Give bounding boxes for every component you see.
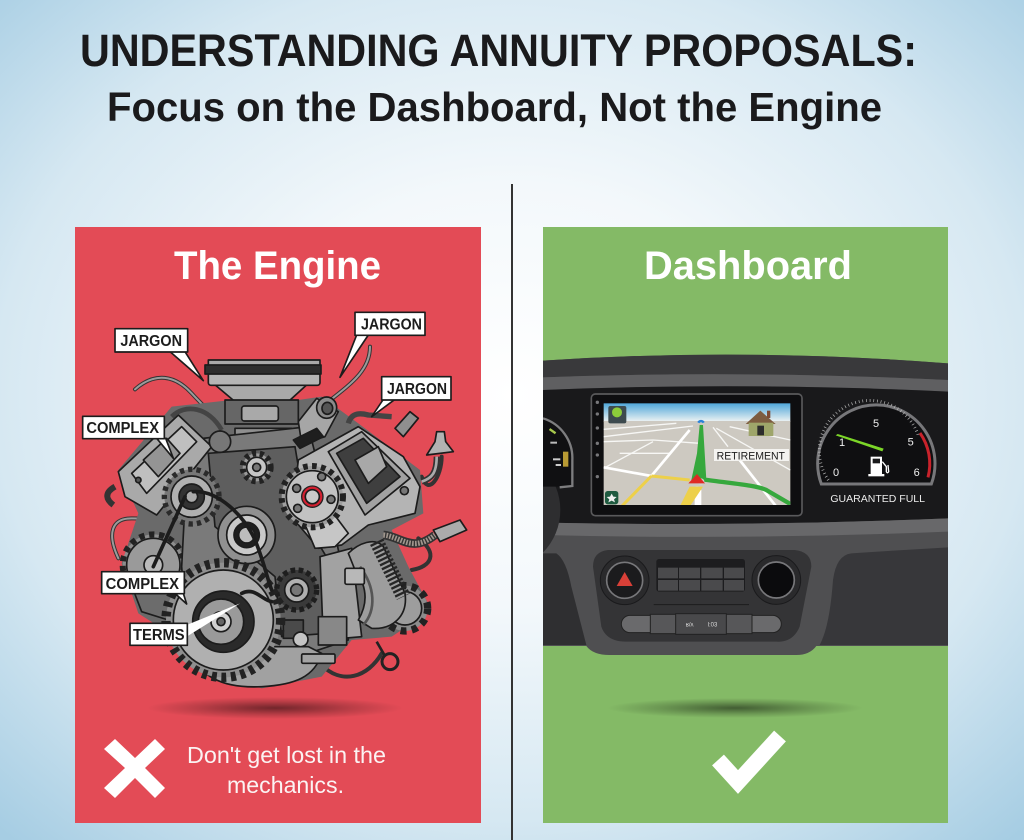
panel: dashboard [543, 227, 948, 823]
lower parts [283, 617, 398, 670]
fuel pump icon [868, 457, 889, 476]
heading: the engine: The Engine [174, 244, 381, 288]
dash body [543, 355, 948, 655]
label: jargon 2: JARGON [361, 316, 422, 333]
divider line [511, 184, 513, 840]
steering wheel [543, 486, 560, 552]
button grid [656, 559, 745, 592]
right lower panel [820, 547, 948, 645]
top hose [348, 414, 392, 423]
label: jargon 1: JARGON [120, 333, 182, 350]
panel: the engine [75, 227, 481, 823]
label: jargon 2 [340, 312, 425, 377]
dashboard shadow [607, 698, 863, 718]
caption [187, 742, 386, 798]
left gauge [543, 418, 572, 487]
air filter [205, 360, 321, 402]
guaranted full label: GUARANTED FULL [830, 494, 925, 505]
title [80, 25, 917, 130]
manifold [225, 400, 298, 443]
icon: white check mark [718, 736, 780, 782]
engine shadow [147, 697, 403, 719]
label: complex 1: COMPLEX [86, 420, 160, 437]
left lower panel [543, 553, 586, 645]
star icon [605, 491, 618, 504]
gauge numbers: 6 [914, 467, 920, 479]
center console [593, 550, 811, 642]
back right gear [382, 586, 428, 631]
label: complex 1 [83, 416, 173, 458]
solenoid and cap [395, 412, 453, 482]
oil pan [192, 647, 322, 687]
right tube [293, 397, 338, 448]
gauge numbers: 5 [873, 418, 879, 430]
caption: mechanics. [227, 772, 344, 798]
hazard knob [600, 556, 649, 605]
gauge numbers: 5 [908, 436, 914, 448]
label: terms: TERMS [133, 627, 185, 644]
dark gear [277, 570, 317, 610]
middle pulley [218, 506, 275, 564]
gauge numbers: 0 [833, 467, 839, 479]
house icon [746, 411, 776, 436]
right knob [752, 556, 801, 604]
central gear with red hub [282, 466, 343, 527]
label: complex 2: COMPLEX [106, 576, 180, 593]
label: complex 2 [102, 572, 187, 604]
map roads [604, 421, 790, 507]
crank gear [166, 563, 281, 677]
upper left gear [164, 469, 219, 524]
bottom button strip [621, 614, 781, 634]
cylinder block [182, 427, 348, 653]
flexible hose with connector [383, 520, 467, 544]
heading: dashboard: Dashboard [644, 244, 852, 288]
back left gear [123, 534, 184, 596]
fuel gauge [818, 400, 935, 505]
gauge needle [836, 434, 884, 451]
engine illustration [83, 312, 467, 688]
label: jargon 3 [372, 377, 451, 417]
left cylinder head [107, 409, 231, 515]
lower left bracket [133, 587, 187, 620]
dashboard illustration [543, 354, 948, 655]
navigation screen: RETIREMENT [717, 450, 785, 462]
bottom button strip: ʁ/ʌ [686, 623, 694, 629]
label: terms [130, 603, 240, 645]
app icon [608, 406, 626, 423]
retirement label [714, 449, 789, 461]
icon: white cross [104, 739, 165, 798]
right cylinder head [292, 427, 420, 548]
caption: Don't get lost in the [187, 742, 386, 768]
label: jargon 3: JARGON [387, 381, 447, 398]
serpentine belts [153, 492, 272, 602]
side buttons [596, 401, 599, 478]
right belt [345, 542, 405, 628]
engine silhouette [118, 397, 432, 688]
gauge numbers [833, 418, 920, 479]
gauge numbers: 1 [839, 437, 845, 449]
hoses behind [112, 347, 442, 677]
navigation screen [591, 394, 802, 516]
bottom button strip: l:03 [708, 623, 718, 629]
label: jargon 1 [115, 329, 203, 381]
title: Focus on the Dashboard, Not the Engine [107, 84, 882, 130]
title: UNDERSTANDING ANNUITY PROPOSALS: [80, 25, 917, 76]
small top gear [243, 453, 271, 481]
